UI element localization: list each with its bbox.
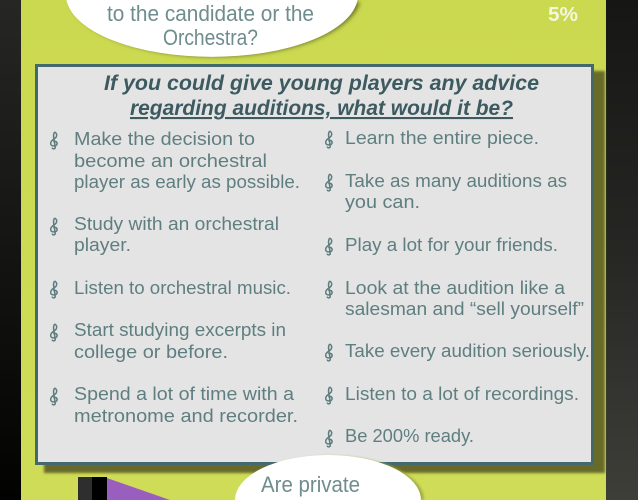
panel heading: regarding auditions, what would it be?	[130, 97, 513, 120]
advice item 1: player as early as possible.	[74, 172, 300, 192]
advice item 2	[51, 214, 279, 255]
callout bubble: top question	[66, 0, 360, 57]
advice item 9	[326, 278, 584, 319]
right advice list	[326, 128, 590, 447]
advice item 5: metronome and recorder.	[74, 406, 298, 426]
percentage label: 5%	[548, 4, 578, 26]
advice item 1: become an orchestral	[74, 151, 267, 171]
advice item 9: salesman and “sell yourself”	[345, 299, 584, 319]
bubble question text	[107, 1, 314, 50]
advice item 10: Take every audition seriously.	[345, 341, 590, 361]
advice item 1: Make the decision to	[74, 129, 255, 149]
advice item 8: Play a lot for your friends.	[345, 235, 558, 255]
advice item 7: you can.	[345, 192, 420, 212]
advice item 4: Start studying excerpts in	[74, 320, 286, 340]
advice item 12: Be 200% ready.	[345, 426, 474, 446]
advice item 7	[326, 171, 567, 212]
bubble question text: Orchestra?	[163, 25, 258, 50]
advice item 4	[51, 320, 286, 362]
advice item 5	[51, 384, 298, 426]
advice item 9: Look at the audition like a	[345, 278, 566, 298]
advice item 4: college or before.	[74, 342, 228, 362]
advice item 1	[51, 129, 300, 192]
advice item 11: Listen to a lot of recordings.	[345, 384, 579, 404]
panel heading: If you could give young players any advice	[104, 72, 539, 95]
left dark side band	[0, 0, 21, 500]
advice item 6: Learn the entire piece.	[345, 128, 539, 148]
left advice list	[51, 129, 300, 426]
advice item 5: Spend a lot of time with a	[74, 384, 295, 404]
advice item 2: player.	[74, 235, 131, 255]
right dark side band	[606, 0, 638, 500]
callout bubble: bottom question	[235, 455, 424, 500]
panel: audition advice	[36, 66, 605, 473]
advice item 3: Listen to orchestral music.	[74, 278, 291, 298]
bottom chart fragment: bar and purple wedge	[78, 477, 170, 500]
bubble question text: Are private	[261, 472, 360, 497]
panel heading	[104, 72, 539, 120]
advice item 7: Take as many auditions as	[345, 171, 567, 191]
bubble question text: to the candidate or the	[107, 1, 314, 26]
advice item 2: Study with an orchestral	[74, 214, 279, 234]
